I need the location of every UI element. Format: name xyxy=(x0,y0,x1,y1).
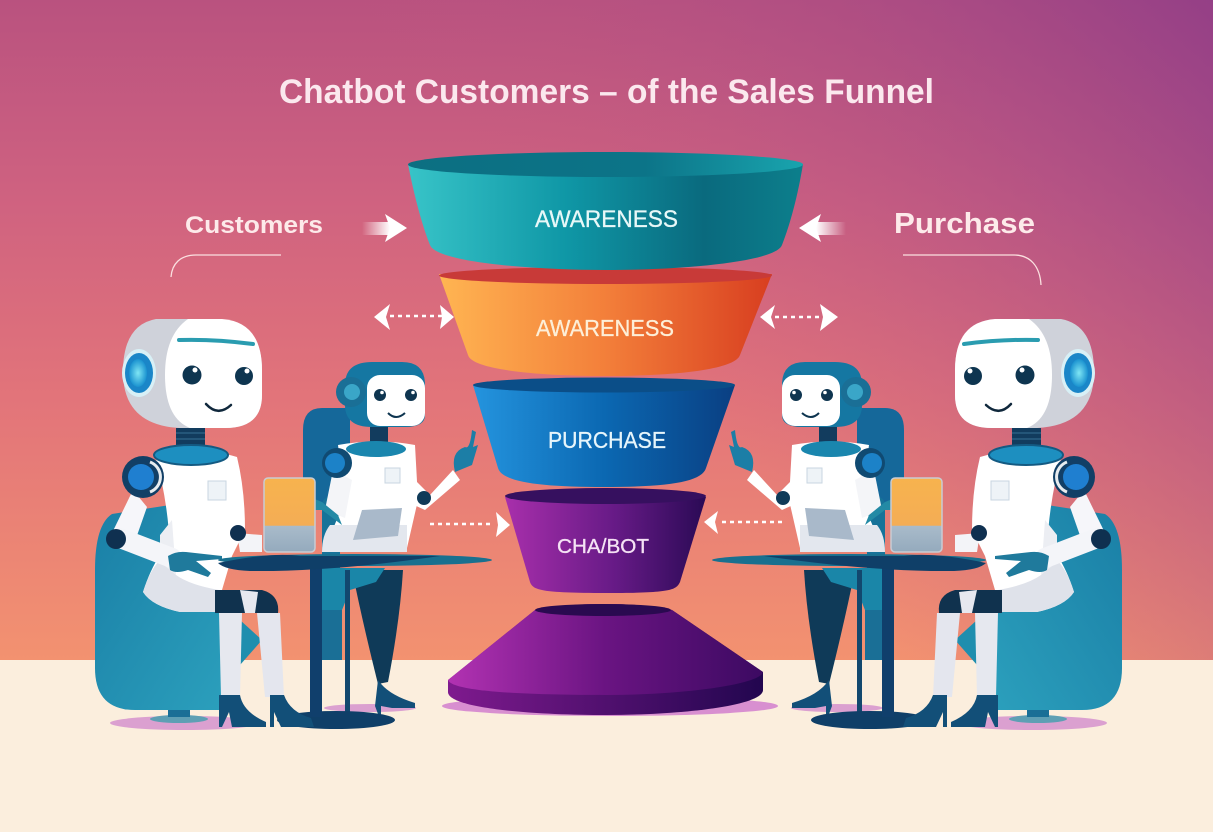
table base left xyxy=(277,711,395,729)
laptop right xyxy=(891,478,942,552)
bracket line left xyxy=(171,255,281,277)
arrow: purchase into funnel xyxy=(799,214,846,242)
funnel tier 2: awareness xyxy=(439,267,772,376)
label: Purchase: Purchase xyxy=(894,208,1035,240)
big robot left xyxy=(95,319,314,730)
arrow: double dashed right xyxy=(760,304,838,331)
label: Customers: Customers xyxy=(185,212,323,239)
title: Chatbot Customers – of the Sales Funnel xyxy=(279,73,934,111)
right scene: mirrored robots and table xyxy=(712,319,1122,730)
small robot right xyxy=(729,362,910,722)
funnel tier 2: awareness: AWARENESS xyxy=(536,315,674,341)
funnel tier 4: chatbot xyxy=(505,488,706,593)
bracket line right xyxy=(903,255,1041,285)
background gradient xyxy=(0,0,1213,662)
funnel tier 4: chatbot: CHA/BOT xyxy=(557,536,649,558)
table left xyxy=(218,554,492,717)
arrow: dashed lower left xyxy=(430,512,510,537)
arrow: customers into funnel xyxy=(362,214,407,242)
funnel tier 1: awareness xyxy=(408,152,803,270)
big robot right xyxy=(903,319,1122,730)
funnel shadow on floor xyxy=(442,696,778,716)
arrow: double dashed left xyxy=(374,304,454,330)
funnel tier 1: awareness: AWARENESS xyxy=(535,206,678,233)
funnel base xyxy=(448,604,763,715)
funnel tier 3: purchase xyxy=(473,378,735,487)
floor xyxy=(0,660,1213,832)
table right xyxy=(712,554,986,717)
table base right xyxy=(811,711,929,729)
funnel xyxy=(408,152,803,716)
laptop left xyxy=(264,478,315,552)
funnel tier 3: purchase: PURCHASE xyxy=(548,427,666,453)
arrow: dashed lower right xyxy=(704,511,782,534)
left scene: robots and table xyxy=(95,319,492,730)
small robot left xyxy=(297,362,478,722)
